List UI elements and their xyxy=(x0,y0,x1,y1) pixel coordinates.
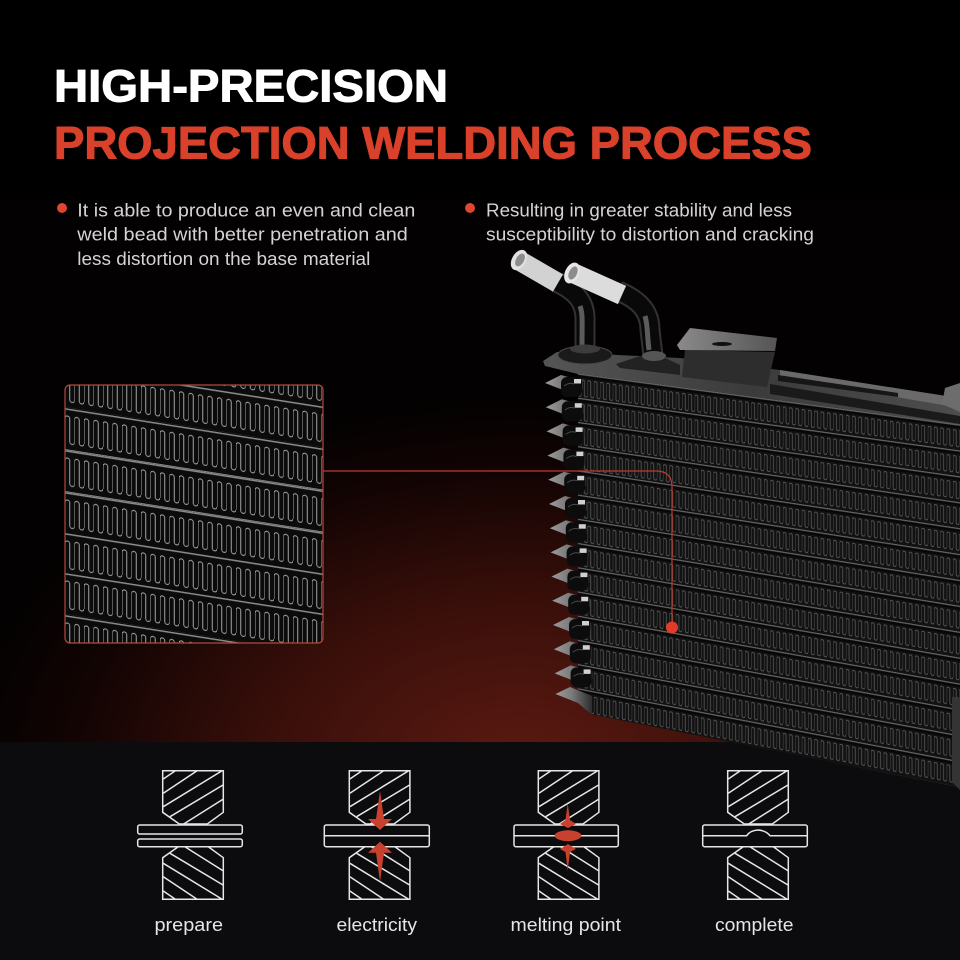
line 2: susceptibility to distortion and cracking xyxy=(486,225,814,245)
title line: high-precision: HIGH-PRECISION xyxy=(54,61,448,112)
label: prepare xyxy=(154,914,223,935)
inlet tube 1 xyxy=(507,247,585,350)
radiator end cap xyxy=(952,697,960,790)
inlet tube 2 xyxy=(561,260,653,356)
step: melting point xyxy=(510,771,621,935)
step: complete xyxy=(703,771,807,935)
title line: projection welding process: PROJECTION WELDING PROCESS xyxy=(54,117,812,168)
top plate xyxy=(543,352,960,425)
red glow backdrop xyxy=(0,200,960,742)
mounting bracket xyxy=(677,328,777,387)
line 3: less distortion on the base material xyxy=(77,249,370,269)
line 1: Resulting in greater stability and less xyxy=(486,201,792,221)
electrodes xyxy=(349,771,410,899)
electrodes xyxy=(163,771,223,899)
line 2: weld bead with better penetration and xyxy=(76,225,408,245)
inset: weld detail close-up xyxy=(64,384,324,644)
bullet dot xyxy=(465,203,475,213)
melt nugget and sparks xyxy=(555,803,581,871)
label: electricity xyxy=(336,914,418,935)
title xyxy=(54,61,812,168)
callout leader line and dot xyxy=(323,471,678,634)
right bracket xyxy=(942,383,960,412)
bullet text: left xyxy=(57,201,415,269)
separate plates xyxy=(138,825,242,847)
radiator fin rows xyxy=(575,373,960,788)
welded plates xyxy=(703,825,807,847)
electrodes xyxy=(538,771,599,899)
line 1: It is able to produce an even and clean xyxy=(77,201,415,221)
radiator product photo xyxy=(507,247,960,790)
flange 1 xyxy=(558,344,612,364)
bullet dot xyxy=(57,203,67,213)
current arrows xyxy=(368,791,392,882)
bottom process band xyxy=(0,742,960,960)
joined plates xyxy=(514,825,618,847)
bullet text: right xyxy=(465,201,814,245)
label: melting point xyxy=(510,914,621,935)
plate slot xyxy=(770,370,960,424)
step: electricity xyxy=(324,771,429,935)
label: complete xyxy=(715,914,794,935)
inset fin rows xyxy=(66,386,322,642)
flange 2 xyxy=(616,351,680,375)
electrodes xyxy=(728,771,788,899)
inset border xyxy=(65,385,323,643)
left fin tabs xyxy=(545,375,593,715)
step: prepare xyxy=(138,771,242,935)
joined plates xyxy=(324,825,429,847)
